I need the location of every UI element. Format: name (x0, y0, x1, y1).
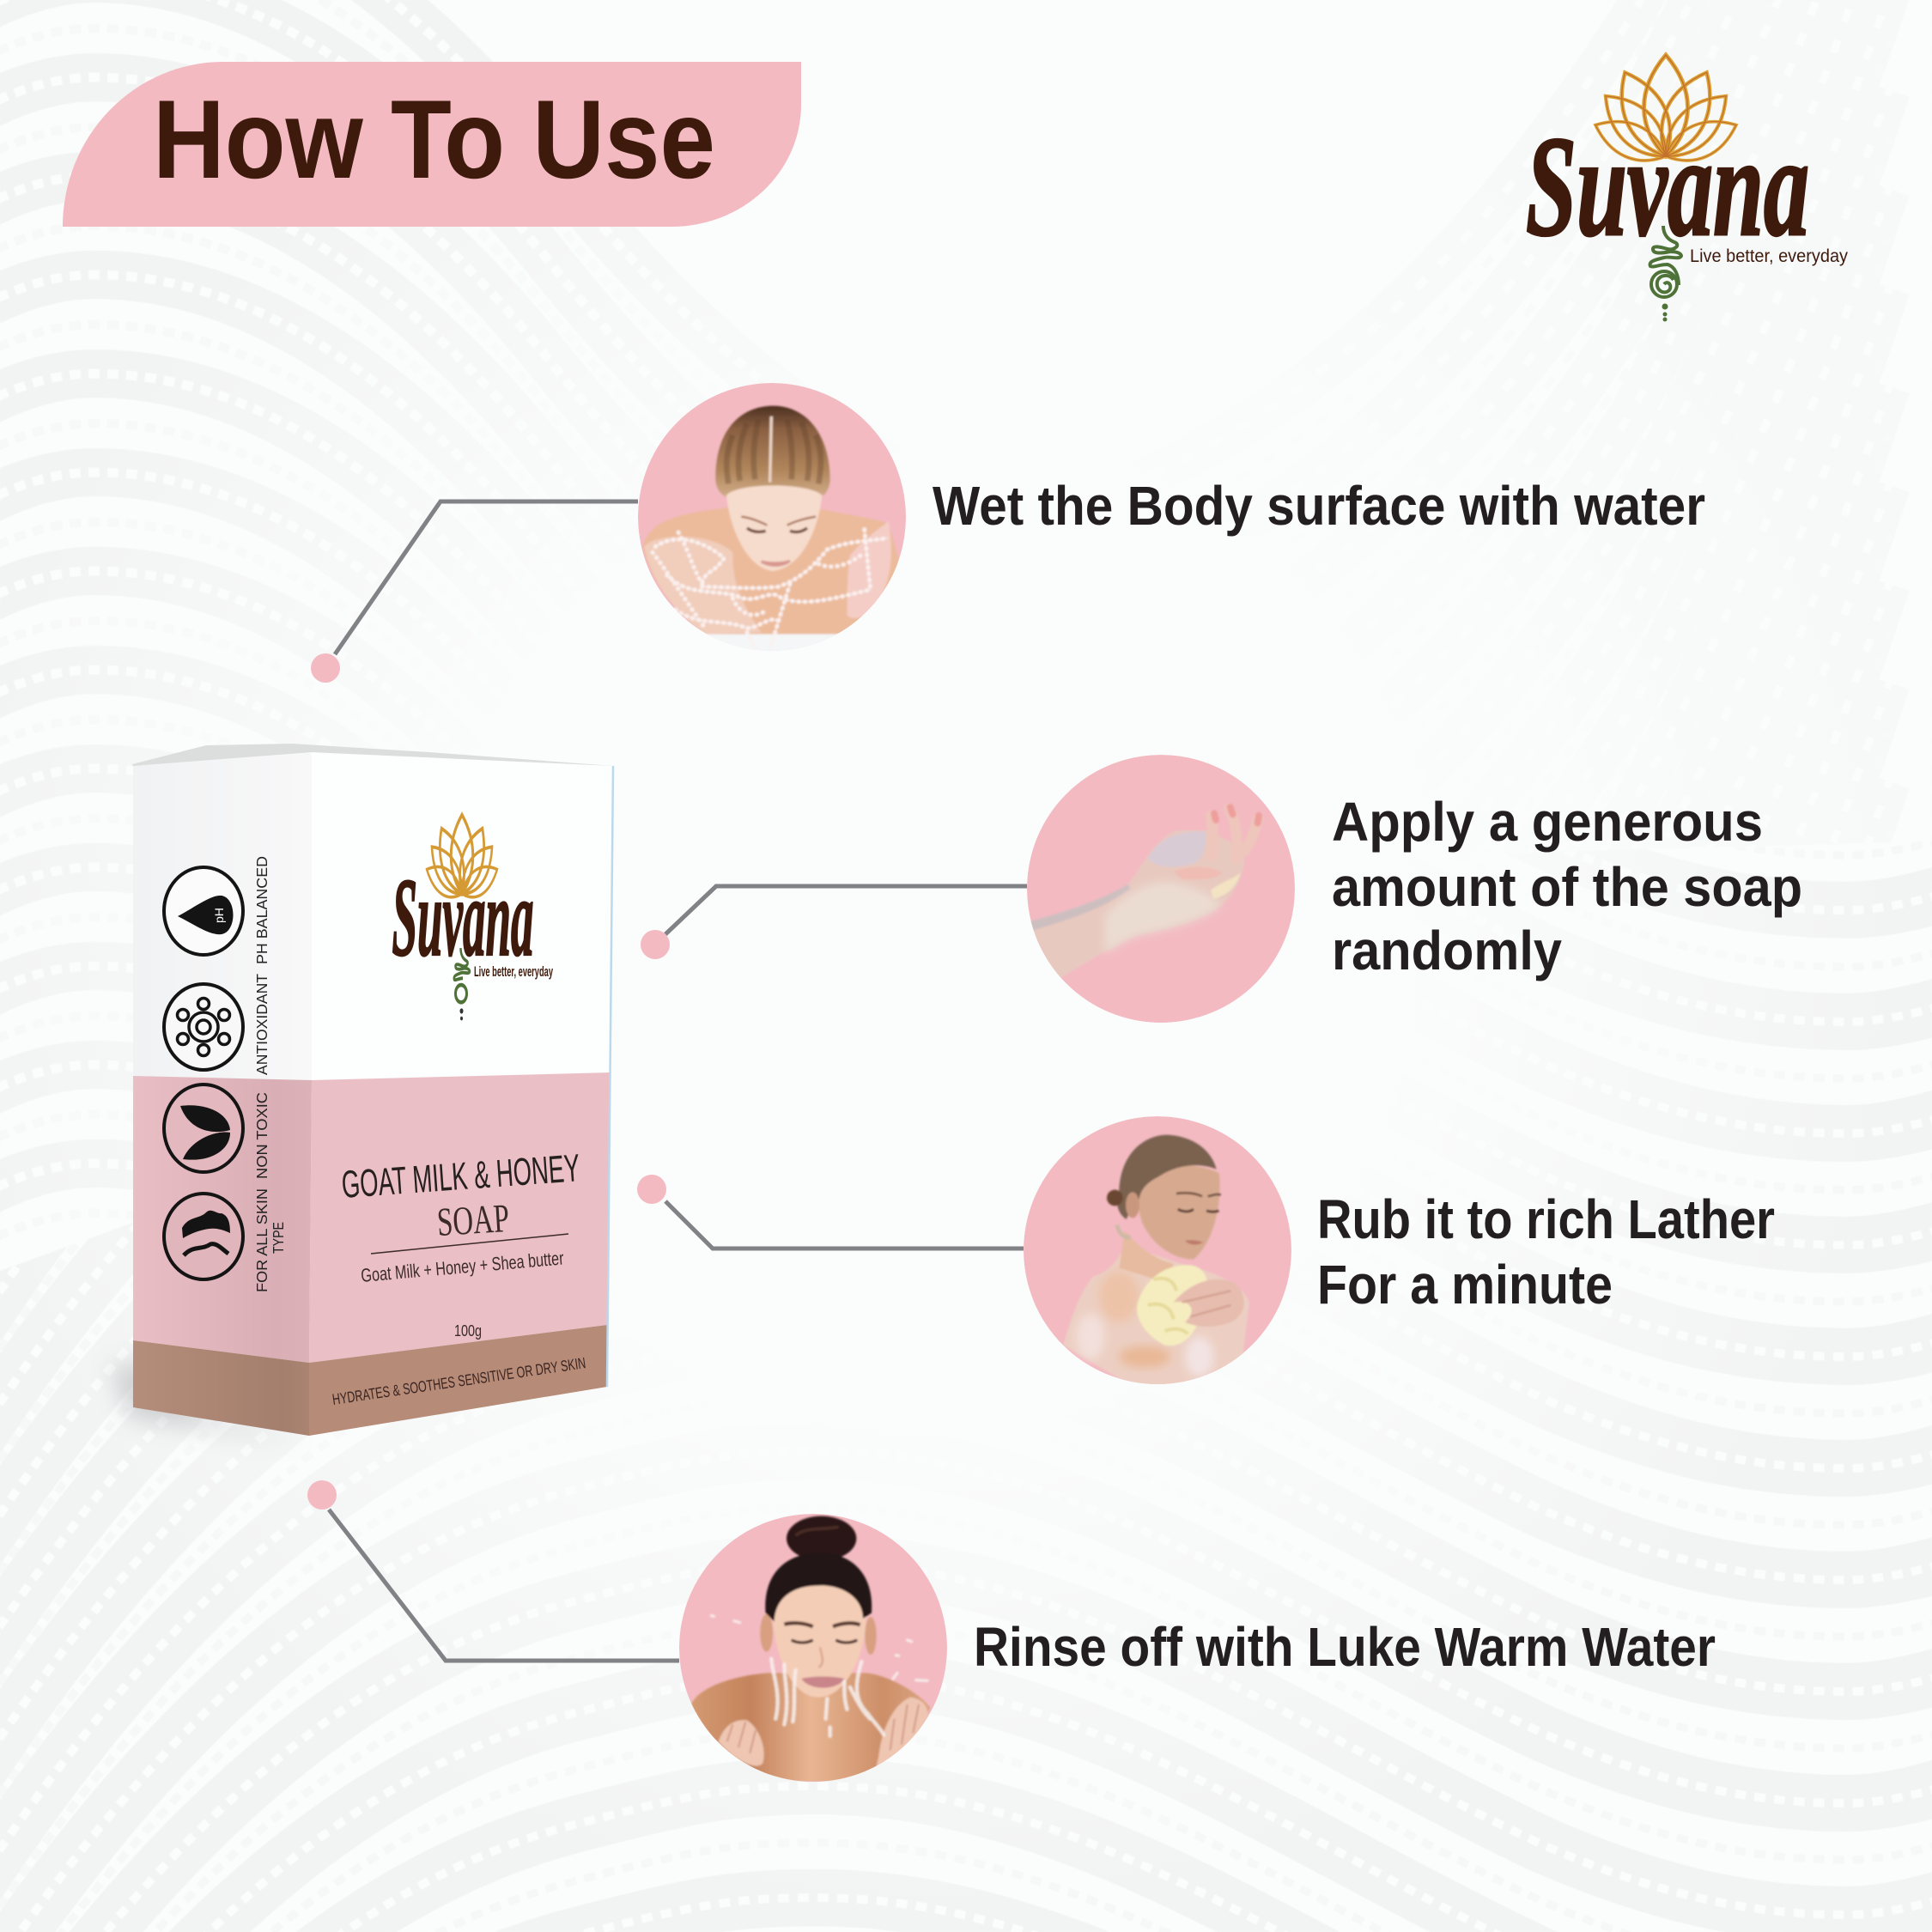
icon: dots (1662, 304, 1668, 321)
spine icon: pH drop: pH (212, 908, 226, 923)
spine labels: TYPE (270, 1222, 287, 1254)
connector 4 (307, 1480, 679, 1661)
step 2 photo: foamy hand (1027, 755, 1295, 1023)
soap label: SOAP (435, 1196, 511, 1245)
title: How To Use (153, 76, 715, 202)
step 1 text: Wet the Body surface with water (933, 475, 1705, 537)
product name: GOAT MILK & HONEY (340, 1145, 581, 1206)
title banner (63, 62, 801, 227)
step 3 text (1317, 1188, 1775, 1315)
box lid (132, 744, 613, 778)
box spine (133, 752, 312, 1436)
step 4 text: Rinse off with Luke Warm Water (974, 1616, 1716, 1678)
benefit line: HYDRATES & SOOTHES SENSITIVE OR DRY SKIN (331, 1354, 586, 1408)
tagline: Live better, everyday (1690, 246, 1848, 266)
box logo: Live better, everyday (474, 964, 553, 979)
step 3 text: For a minute (1317, 1254, 1613, 1315)
connector 3 (637, 1175, 1024, 1249)
box front (309, 752, 613, 1436)
step 2 text: amount of the soap (1332, 856, 1802, 918)
icon: lotus (1589, 55, 1743, 172)
logo: Suvana (1526, 55, 1848, 321)
icon: green spiral (1650, 226, 1681, 297)
step 3 photo: woman with loofah (1024, 1116, 1291, 1385)
box shadow (112, 1365, 309, 1443)
step 2 text (1332, 791, 1802, 981)
spine icon: pH drop (164, 867, 243, 955)
product: soap box (112, 744, 613, 1443)
spine labels: PH BALANCED (253, 856, 270, 964)
step 2 text: randomly (1332, 920, 1562, 981)
box logo (392, 815, 553, 1020)
spine labels: NON TOXIC (253, 1092, 270, 1179)
connector 2 (641, 886, 1027, 959)
step 1 photo: woman splashing water (638, 383, 906, 659)
spine labels: FOR ALL SKIN (253, 1188, 270, 1292)
spine icon: leaves (164, 1084, 243, 1172)
box logo: Suvana (392, 855, 534, 980)
step 3 text: Rub it to rich Lather (1317, 1188, 1775, 1250)
spine labels (253, 856, 287, 1292)
step 2 text: Apply a generous (1332, 791, 1763, 853)
step 4 photo: woman rinsing face (679, 1514, 947, 1782)
ingredients: Goat Milk + Honey + Shea butter (360, 1247, 565, 1286)
connector 1 (311, 501, 638, 683)
spine labels: ANTIOXIDANT (253, 974, 270, 1075)
spine icon: molecule (164, 984, 243, 1070)
spine icon: skin layers (164, 1194, 243, 1279)
weight: 100g (454, 1322, 482, 1340)
